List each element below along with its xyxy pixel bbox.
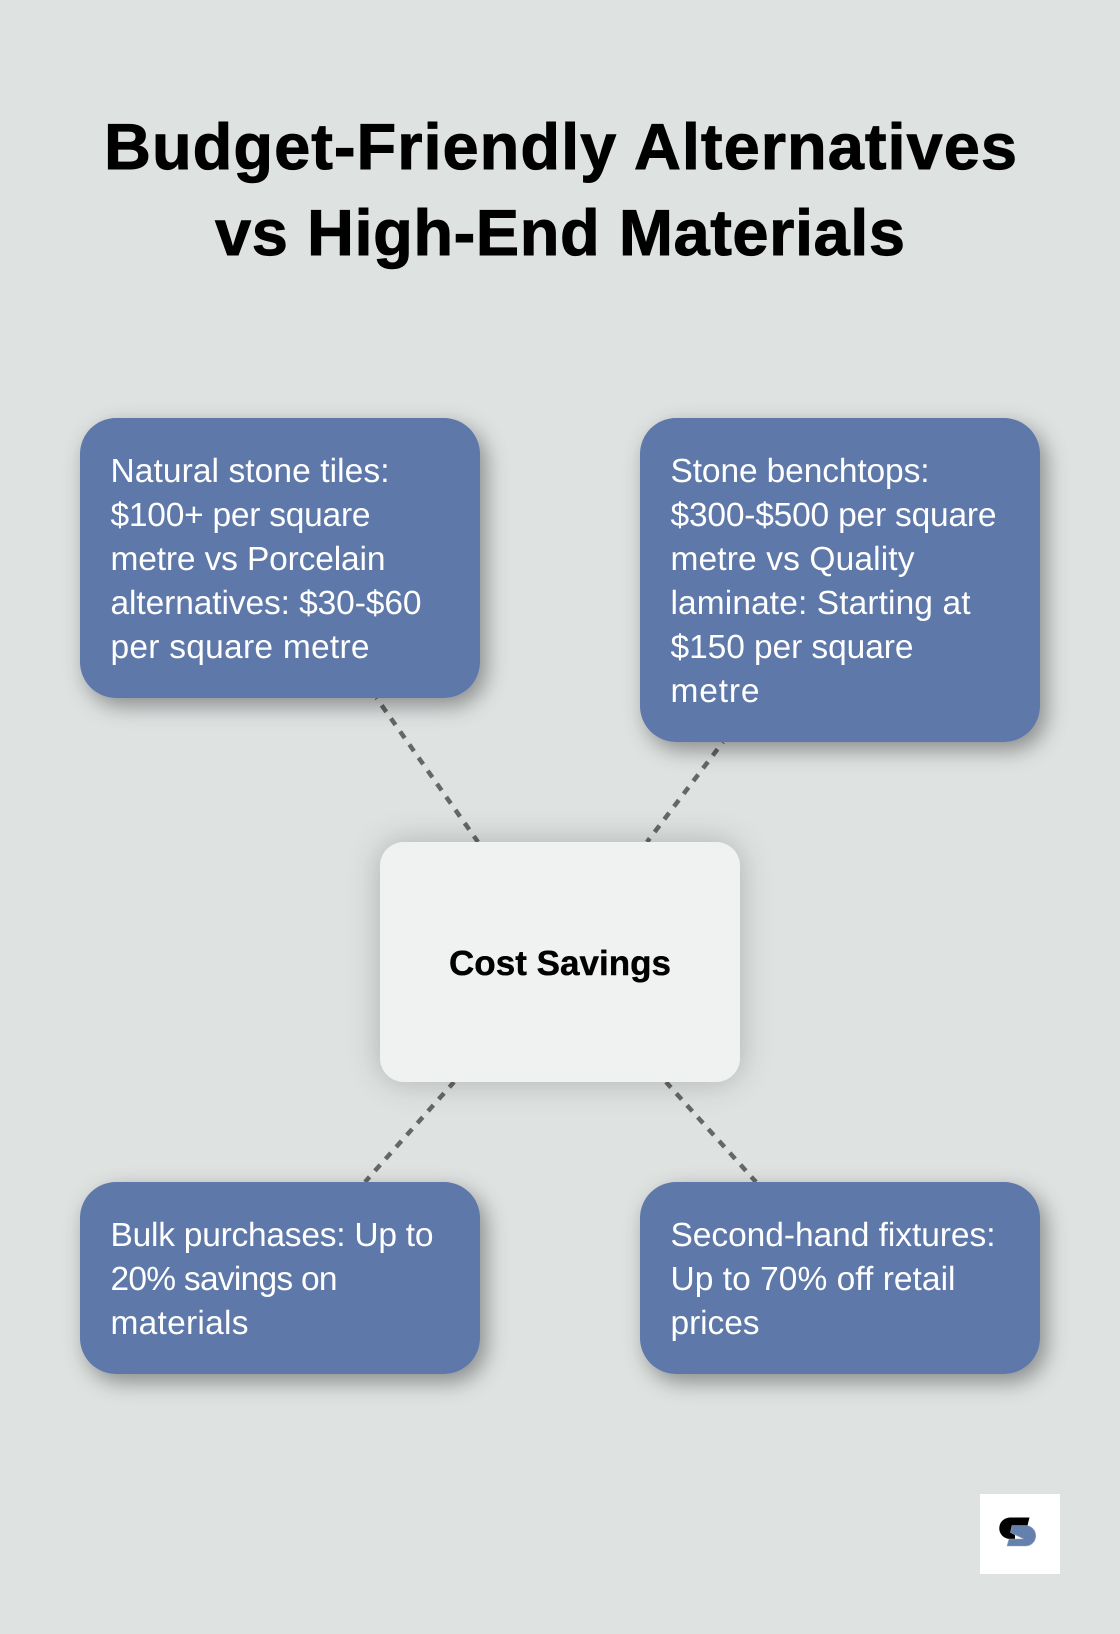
panel: stone benchtops [640,418,1040,742]
panel: stone benchtops: $150 per square [670,629,914,666]
panel: stone benchtops: laminate: Starting at [670,585,971,622]
panel: second-hand fixtures: Second-hand fixtures: [670,1217,996,1254]
panel: natural stone tiles: Natural stone tiles: [110,453,390,490]
panel: stone benchtops: Stone benchtops: [670,453,930,490]
panel: stone benchtops: metre [670,673,760,710]
panel: second-hand fixtures [640,1182,1040,1374]
panel: second-hand fixtures: prices [670,1305,760,1342]
panel: natural stone tiles: per square metre [110,629,370,666]
title [104,110,1017,269]
panel: natural stone tiles: metre vs Porcelain [110,541,386,578]
connector: second-hand fixtures to cost savings [666,1082,756,1182]
title: Budget-Friendly Alternatives [104,110,1017,183]
panel: bulk purchases: Bulk purchases: Up to [110,1217,434,1254]
panel: bulk purchases [80,1182,480,1374]
panel: natural stone tiles [80,418,480,698]
connector: stone benchtops to cost savings [647,742,723,842]
logo [980,1494,1060,1574]
connector: bulk purchases to cost savings [365,1082,454,1182]
panel: natural stone tiles: $100+ per square [110,497,370,534]
panel: bulk purchases: 20% savings on [110,1261,338,1298]
panel: stone benchtops: $300-$500 per square [670,497,996,534]
connector: natural stone tiles to cost savings [376,698,478,842]
panel: cost savings centre [380,842,740,1082]
panel: bulk purchases: materials [110,1305,248,1342]
panel: second-hand fixtures: Up to 70% off retail [670,1261,956,1298]
panel: cost savings centre: Cost Savings [449,944,671,983]
panel: stone benchtops: metre vs Quality [670,541,915,578]
panel: natural stone tiles: alternatives: $30-$60 [110,585,422,622]
title: vs High-End Materials [215,196,905,269]
